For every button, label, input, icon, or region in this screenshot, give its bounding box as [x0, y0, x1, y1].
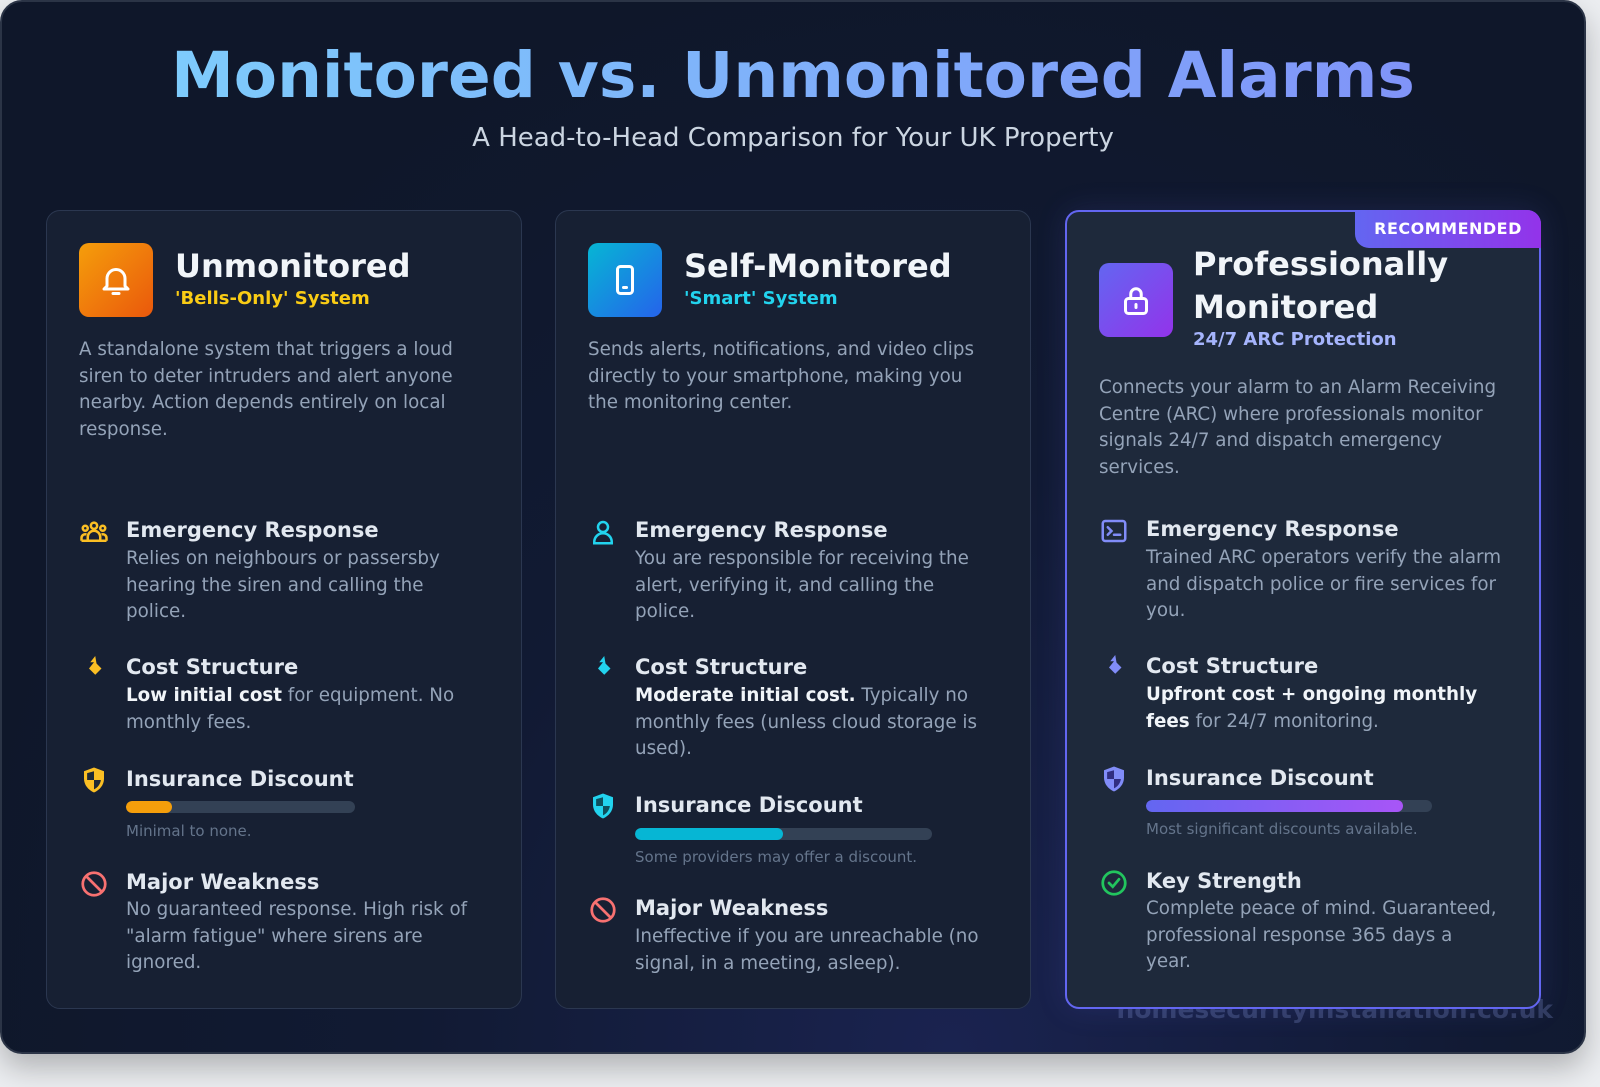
- panel: self-monitored: used).: [635, 738, 692, 759]
- feature: insurance: Insurance Discount: [126, 767, 354, 791]
- subheading: 'Smart' System: [684, 288, 838, 309]
- icon: shield: [593, 794, 613, 818]
- description: directly to your smartphone, making you: [588, 366, 962, 386]
- panel: unmonitored: monthly fees.: [126, 712, 251, 732]
- icon: phone: [588, 243, 662, 317]
- panel: professionally monitored: Upfront cost + ongoing monthly: [1146, 684, 1477, 705]
- heading: Unmonitored: [175, 247, 411, 285]
- feature: cost: Cost Structure: [1146, 654, 1318, 678]
- feature: emergency response: Emergency Response: [1146, 517, 1399, 541]
- feature: emergency response: Emergency Response: [126, 518, 379, 542]
- feature: insurance: Insurance Discount: [1146, 766, 1374, 790]
- bar: insurance: [126, 801, 355, 813]
- icon: ban: [590, 897, 616, 923]
- panel: professionally monitored: Trained ARC operators verify the alarm: [1146, 547, 1501, 568]
- icon: people: [80, 521, 108, 542]
- subheading: 24/7 ARC Protection: [1193, 329, 1397, 350]
- panel: unmonitored: ignored.: [126, 952, 201, 973]
- title: Monitored vs. Unmonitored Alarms: [171, 39, 1415, 112]
- icon: cost: [598, 656, 610, 675]
- panel: professionally monitored: Complete peace of mind. Guaranteed,: [1146, 898, 1497, 919]
- panel: unmonitored: Low initial cost for equipment. No: [126, 685, 454, 706]
- description: A standalone system that triggers a loud: [79, 339, 453, 360]
- description: services.: [1099, 456, 1180, 478]
- feature: insurance: Insurance Discount: [635, 793, 863, 817]
- panel: self-monitored: Ineffective if you are unreachable (no: [635, 926, 979, 947]
- icon: shield: [84, 768, 104, 792]
- icon: cost: [1109, 655, 1122, 674]
- icon: lock: [1099, 263, 1173, 337]
- description: [79, 339, 453, 440]
- icon: shield: [1104, 766, 1124, 792]
- feature: weakness: Major Weakness: [635, 896, 828, 920]
- bar: insurance: [1146, 800, 1432, 812]
- icon: check: [1101, 870, 1127, 896]
- bar: insurance: [635, 828, 932, 840]
- panel: professionally monitored: you.: [1146, 600, 1185, 621]
- description: [1099, 377, 1496, 478]
- feature: cost: Cost Structure: [126, 655, 298, 679]
- icon: person: [593, 520, 613, 544]
- icon: cost: [89, 656, 102, 675]
- feature: weakness: Major Weakness: [126, 870, 319, 894]
- description: nearby. Action depends entirely on local: [79, 392, 446, 413]
- panel: professionally monitored: fees for 24/7 monitoring.: [1146, 710, 1379, 732]
- panel: self-monitored: You are responsible for receiving the: [635, 548, 969, 569]
- panel: unmonitored: hearing the siren and calling the: [126, 574, 424, 596]
- panel: unmonitored: Minimal to none.: [126, 822, 252, 840]
- panel: self-monitored: police.: [635, 601, 695, 622]
- panel: professionally monitored: professional response 365 days a: [1146, 924, 1452, 946]
- subheading: 'Bells-Only' System: [175, 288, 370, 309]
- description: response.: [79, 418, 168, 440]
- icon: terminal: [1102, 520, 1126, 542]
- panel: self-monitored: Moderate initial cost. Typically no: [635, 685, 968, 706]
- panel: unmonitored: No guaranteed response. High risk of: [126, 899, 467, 920]
- panel: unmonitored: Relies on neighbours or passersby: [126, 548, 440, 569]
- heading: Monitored: [1193, 288, 1378, 326]
- panel: unmonitored: "alarm fatigue" where sirens are: [126, 926, 423, 946]
- panel: unmonitored: [46, 210, 522, 1009]
- feature: cost: Cost Structure: [635, 655, 807, 679]
- panel: professionally monitored: year.: [1146, 951, 1191, 972]
- description: Connects your alarm to an Alarm Receiving: [1099, 377, 1496, 398]
- subtitle: A Head-to-Head Comparison for Your UK Property: [472, 123, 1114, 153]
- description: [588, 339, 974, 413]
- description: Centre (ARC) where professionals monitor: [1099, 404, 1483, 424]
- icon: ban: [81, 871, 107, 897]
- watermark: homesecurityinstallation.co.uk: [1116, 995, 1553, 1024]
- panel: unmonitored: police.: [126, 601, 186, 622]
- feature: emergency response: Emergency Response: [635, 518, 888, 542]
- feature: key strength: Key Strength: [1146, 869, 1302, 893]
- heading: [1193, 245, 1448, 326]
- heading: Self-Monitored: [684, 247, 952, 285]
- badge: recommended: RECOMMENDED: [1374, 219, 1522, 238]
- description: signals 24/7 and dispatch emergency: [1099, 430, 1442, 451]
- icon: bell: [79, 243, 153, 317]
- panel: professionally monitored: and dispatch police or fire services for: [1146, 574, 1496, 594]
- badge: recommended: [1355, 210, 1541, 248]
- panel: self-monitored: signal, in a meeting, asleep).: [635, 952, 900, 974]
- description: the monitoring center.: [588, 392, 792, 413]
- heading: Professionally: [1193, 245, 1448, 283]
- panel: professionally monitored: [1065, 210, 1541, 1009]
- description: siren to deter intruders and alert anyone: [79, 366, 453, 386]
- panel: self-monitored: alert, verifying it, and calling the: [635, 574, 934, 596]
- panel: self-monitored: [555, 210, 1031, 1009]
- panel: professionally monitored: Most significant discounts available.: [1146, 820, 1418, 838]
- panel: self-monitored: Some providers may offer a discount.: [635, 848, 917, 866]
- panel: self-monitored: monthly fees (unless cloud storage is: [635, 712, 977, 732]
- description: Sends alerts, notifications, and video clips: [588, 339, 974, 360]
